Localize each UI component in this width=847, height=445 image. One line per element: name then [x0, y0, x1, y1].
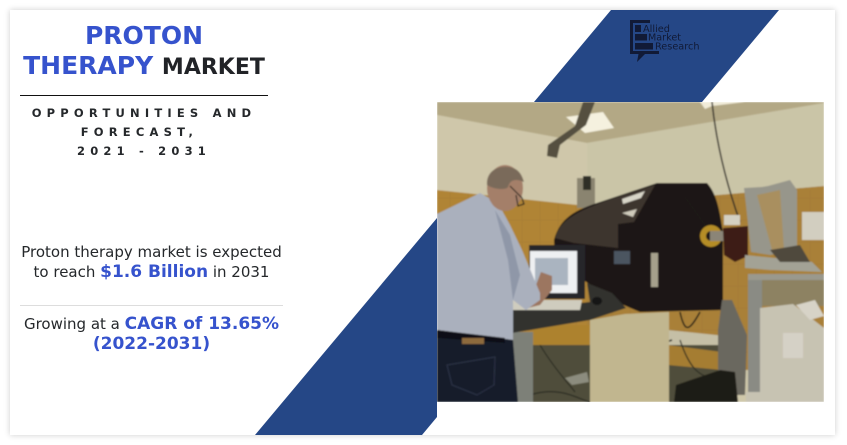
beige cabinet and pedestal: [590, 312, 669, 402]
white equipment cabinet: [759, 303, 824, 394]
title: THERAPY MARKET: [23, 51, 265, 80]
title: PROTON: [85, 21, 203, 50]
CAGR statement: (2022-2031): [93, 334, 210, 354]
bottom blue band: [255, 218, 437, 435]
heading rule: [20, 95, 268, 96]
desk: [512, 283, 626, 333]
title: [23, 21, 265, 80]
logo: Allied Market Research: Market: [648, 32, 681, 44]
logo: Allied Market Research: Allied: [643, 24, 670, 35]
lower wall strip and floor: [668, 329, 719, 346]
market size statement: [21, 243, 282, 282]
camera arm: [547, 102, 595, 158]
market size statement: to reach $1.6 Billion in 2031: [34, 262, 269, 282]
subtitle: FORECAST,: [81, 125, 198, 139]
dark box bottom: [674, 370, 738, 402]
technician jeans: [437, 330, 518, 402]
right machine stand: [723, 226, 748, 262]
market size statement: Proton therapy market is expected: [21, 243, 282, 261]
logo: Allied Market Research: Research: [655, 42, 700, 52]
stats rule: [20, 305, 283, 306]
CAGR statement: Growing at a CAGR of 13.65%: [24, 314, 279, 334]
CAGR statement: [24, 314, 279, 354]
technician arm: [528, 272, 552, 308]
machine brass fitting: [700, 225, 722, 247]
room: [736, 370, 749, 402]
subtitle: [32, 106, 256, 158]
subtitle: OPPORTUNITIES AND: [32, 106, 256, 120]
cable: [712, 102, 740, 222]
top blue band: [534, 10, 779, 102]
technician head: [487, 165, 523, 211]
support column: [718, 300, 747, 395]
technician shirt: [437, 193, 540, 340]
photo: technician at proton therapy machine: [437, 102, 824, 402]
wall device: [577, 178, 595, 208]
dark machine housing: [554, 183, 723, 312]
logo: Allied Market Research: [630, 20, 700, 62]
subtitle: 2021 - 2031: [77, 144, 211, 158]
laptop monitor: [529, 245, 585, 299]
ceiling light: [566, 112, 614, 133]
keyboard: [510, 300, 582, 310]
mouse: [592, 297, 602, 305]
